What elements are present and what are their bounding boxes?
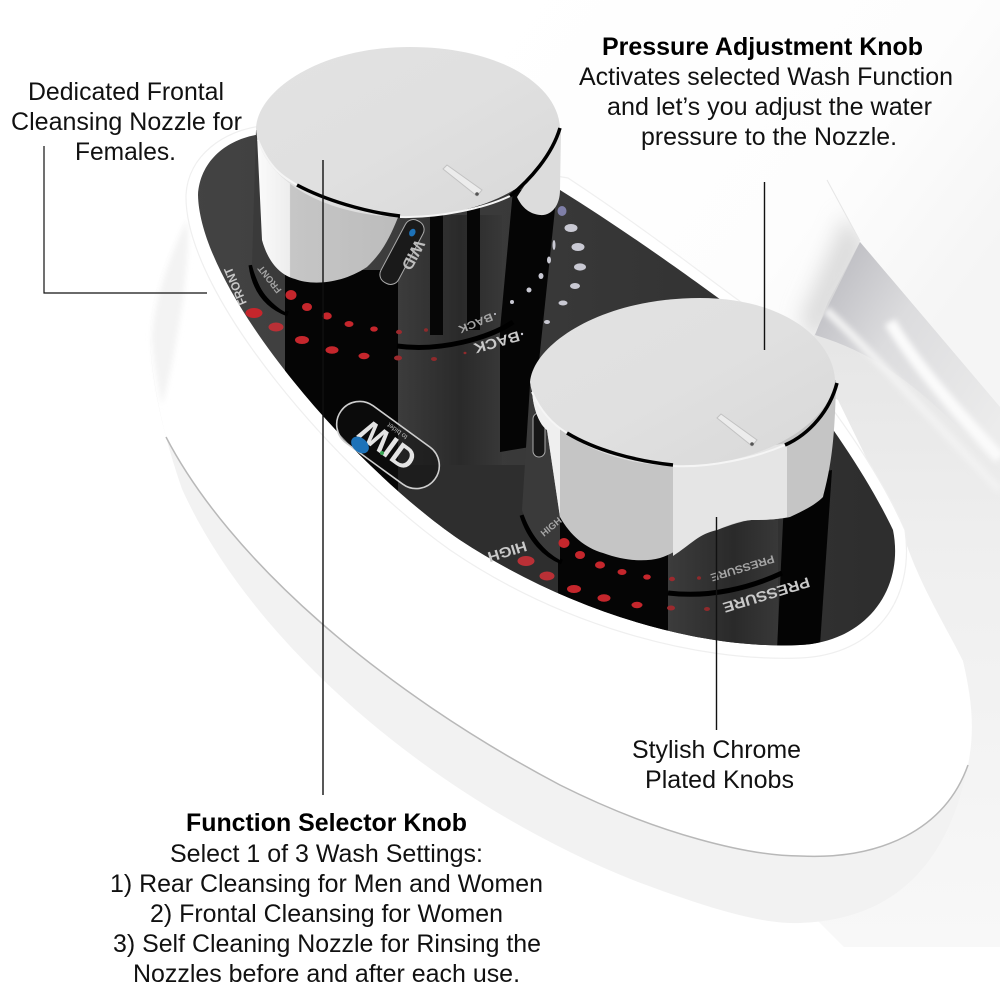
text block: pressure adjustment knob: pressure to the Nozzle. [641, 123, 897, 151]
left body shading [152, 220, 188, 405]
logo droplet [348, 433, 372, 457]
red dots: function selector [246, 290, 466, 361]
chrome reflection left [257, 135, 399, 283]
panel labels: FRONT [221, 264, 250, 307]
text block: frontal nozzle [11, 78, 242, 166]
text block: function selector knob: Select 1 of 3 Wash Settings: [170, 840, 483, 868]
knob rim highlight [258, 140, 510, 217]
text block: pressure adjustment knob: and let’s you adjust the water [607, 93, 932, 121]
heading: function selector knob: Function Selector Knob [186, 809, 467, 837]
chrome highlight centre [673, 443, 787, 556]
knob left body [252, 130, 285, 312]
knob indicator [717, 414, 757, 446]
chrome reflection right [517, 130, 561, 215]
body top surface [150, 130, 972, 856]
white position dots [494, 206, 586, 335]
logo badge on panel [328, 392, 448, 498]
panel labels: BACK [456, 310, 494, 335]
panel labels: PRESSURE [720, 573, 812, 615]
red dots: pressure [518, 538, 710, 611]
panel labels: HIGH [486, 537, 529, 564]
text block: frontal nozzle: Females. [75, 138, 176, 166]
knob left body [522, 385, 560, 560]
logo badge on panel: to bidet [386, 421, 409, 440]
text block: frontal nozzle: Dedicated Frontal [28, 78, 224, 106]
knob mini logo: WID [398, 237, 427, 272]
knob base shadow arcs [251, 265, 513, 347]
knob mini logo [533, 413, 545, 457]
heading: pressure adjustment knob: Pressure Adjustment Knob [602, 33, 923, 61]
panel labels [221, 263, 812, 615]
leader line: function selector [322, 160, 324, 795]
text block: function selector knob [110, 809, 543, 988]
logo badge on panel: WID [352, 412, 423, 478]
text block: pressure adjustment knob: Activates selected Wash Function [579, 63, 953, 91]
text block: function selector knob: 1) Rear Cleansing for Men and Women [110, 870, 543, 898]
knob top [530, 298, 835, 466]
black lip [567, 383, 837, 465]
panel labels: BACK [471, 327, 521, 356]
body seam line [166, 437, 968, 856]
text block: function selector knob: Nozzles before and after each use. [133, 960, 520, 988]
chrome highlight left [532, 390, 560, 517]
text block: function selector knob: 2) Frontal Cleansing for Women [150, 900, 503, 928]
text block: chrome knobs [632, 736, 801, 794]
panel labels: PRESSURE [709, 552, 776, 583]
knob stripes [430, 205, 480, 335]
pressure adjustment knob [522, 298, 837, 560]
leader line: chrome knobs [716, 517, 718, 730]
control panel bezel [186, 126, 907, 658]
panel labels: HIGH [539, 515, 564, 539]
leader line: frontal nozzle [44, 146, 207, 293]
black lip [297, 128, 560, 216]
text block: frontal nozzle: Cleansing Nozzle for [11, 108, 242, 136]
text block: pressure adjustment knob [579, 33, 953, 151]
text block: chrome knobs: Stylish Chrome [632, 736, 801, 764]
text block: chrome knobs: Plated Knobs [645, 766, 794, 794]
function selector knob [252, 47, 561, 335]
knob indicator [443, 165, 482, 196]
bidet body [150, 126, 972, 923]
panel labels: FRONT [256, 263, 284, 295]
text block: function selector knob: 3) Self Cleaning Nozzle for Rinsing the [113, 930, 541, 958]
black control panel [198, 135, 896, 646]
knob top [256, 47, 560, 217]
leader line: pressure knob [764, 182, 766, 350]
toilet seat background [792, 177, 1000, 902]
chrome sleeve [532, 380, 836, 560]
knob mini logo [377, 216, 435, 292]
knob rim highlight [532, 392, 785, 466]
